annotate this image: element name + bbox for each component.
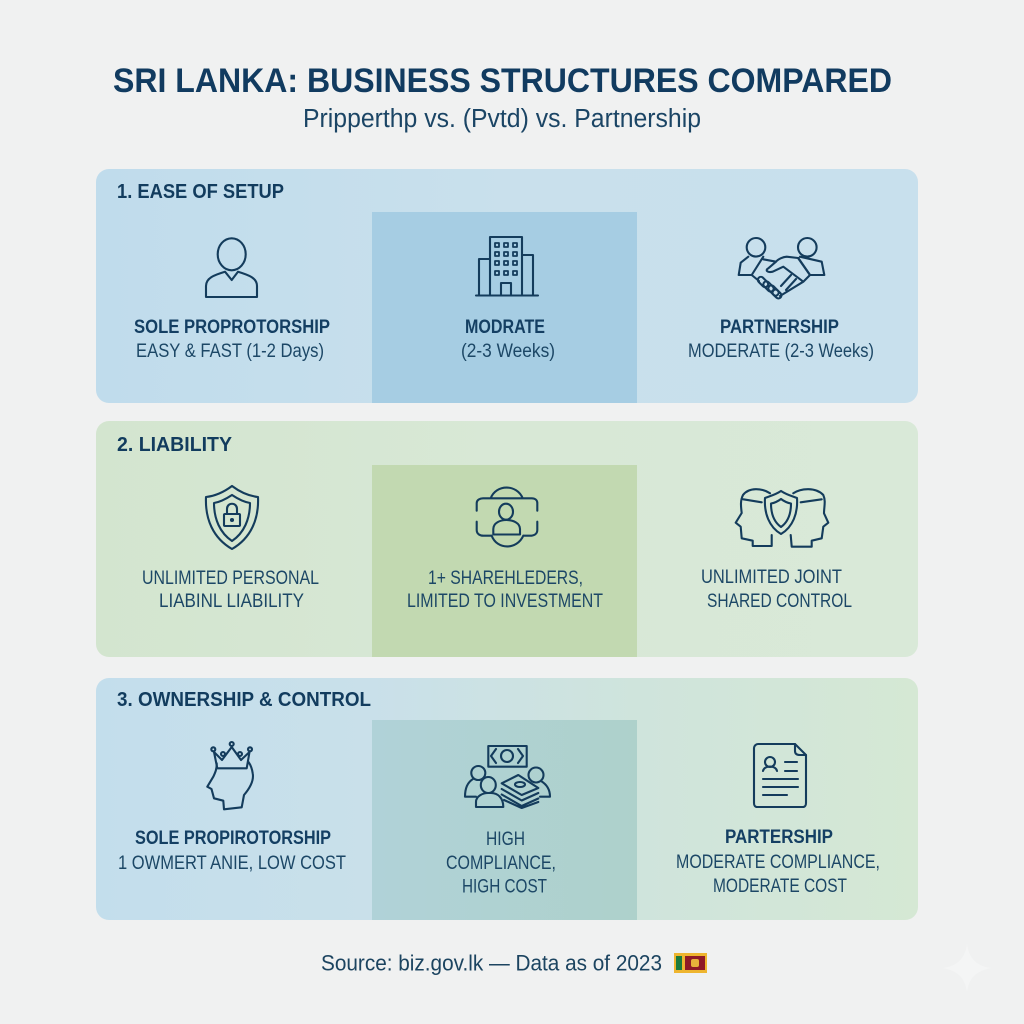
title: SRI LANKA: BUSINESS STRUCTURES COMPARED xyxy=(113,62,892,100)
icon: handshake xyxy=(739,238,824,300)
text: unlimited personal liability: UNLIMITED PERSONAL xyxy=(142,568,319,589)
text: sole proprietorship setup xyxy=(134,317,330,362)
text: unlimited joint: SHARED CONTROL xyxy=(707,591,852,612)
text: partnership ownership: PARTERSHIP xyxy=(725,827,833,848)
text: partnership setup xyxy=(688,317,874,362)
icon: shareholders and money xyxy=(465,746,550,808)
icon: Sri Lanka flag xyxy=(674,953,707,973)
text: moderate setup xyxy=(461,317,555,362)
text: sole proprietorship ownership xyxy=(118,828,346,874)
text: sole proprietorship setup: SOLE PROPROTORSHIP xyxy=(134,317,330,338)
text: high compliance: HIGH COST xyxy=(462,876,547,898)
text: sole proprietorship ownership: 1 OWMERT ANIE, LOW COST xyxy=(118,853,346,874)
heading: ease of setup: 1. EASE OF SETUP xyxy=(117,180,284,203)
icon: two heads with shield xyxy=(736,489,828,547)
icon: document with profile xyxy=(754,744,806,807)
subtitle: Pripperthp vs. (Pvtd) vs. Partnership xyxy=(303,105,701,133)
text: partnership setup: PARTNERSHIP xyxy=(720,317,839,338)
text: high compliance: COMPLIANCE, xyxy=(446,853,556,874)
text: high compliance: HIGH xyxy=(486,829,525,850)
icon: office building xyxy=(476,237,538,296)
text: sole proprietorship ownership: SOLE PROPIROTORSHIP xyxy=(135,828,331,849)
highlighted column: ease of setup xyxy=(372,212,637,403)
text: unlimited personal liability xyxy=(142,568,319,612)
icon: sparkle watermark xyxy=(943,944,991,992)
text: partnership setup: MODERATE (2-3 Weeks) xyxy=(688,341,874,362)
text: shareholders limited: LIMITED TO INVESTMENT xyxy=(407,591,603,612)
text: partnership ownership: MODERATE COST xyxy=(713,876,847,897)
text: moderate setup: (2-3 Weeks) xyxy=(461,341,555,362)
heading: ownership and control: 3. OWNERSHIP & CONTROL xyxy=(117,688,371,711)
text: unlimited joint: UNLIMITED JOINT xyxy=(701,567,842,588)
footer source: Source: biz.gov.lk — Data as of 2023 xyxy=(321,950,662,976)
heading: liability: 2. LIABILITY xyxy=(117,433,232,456)
highlighted column: liability xyxy=(372,465,637,657)
text: unlimited joint xyxy=(701,567,852,612)
text: partnership ownership: MODERATE COMPLIANCE, xyxy=(676,852,880,873)
text: shareholders limited: 1+ SHAREHLEDERS, xyxy=(428,568,583,589)
icon: shield with padlock xyxy=(206,486,258,549)
text: sole proprietorship setup: EASY & FAST (1-2 Days) xyxy=(136,341,324,362)
panel: ease of setup xyxy=(96,169,918,403)
text: moderate setup: MODRATE xyxy=(465,317,545,338)
text: shareholders limited xyxy=(407,568,603,612)
text: high compliance xyxy=(446,829,556,898)
text: unlimited personal liability: LIABINL LIABILITY xyxy=(159,591,304,612)
panel: ownership and control xyxy=(96,678,918,920)
icon: person xyxy=(206,238,257,297)
highlighted column: ownership xyxy=(372,720,637,920)
icon: shareholder in frame xyxy=(477,488,537,546)
panel: liability xyxy=(96,421,918,657)
text: partnership ownership xyxy=(676,827,880,897)
icon: crowned head xyxy=(207,742,253,809)
